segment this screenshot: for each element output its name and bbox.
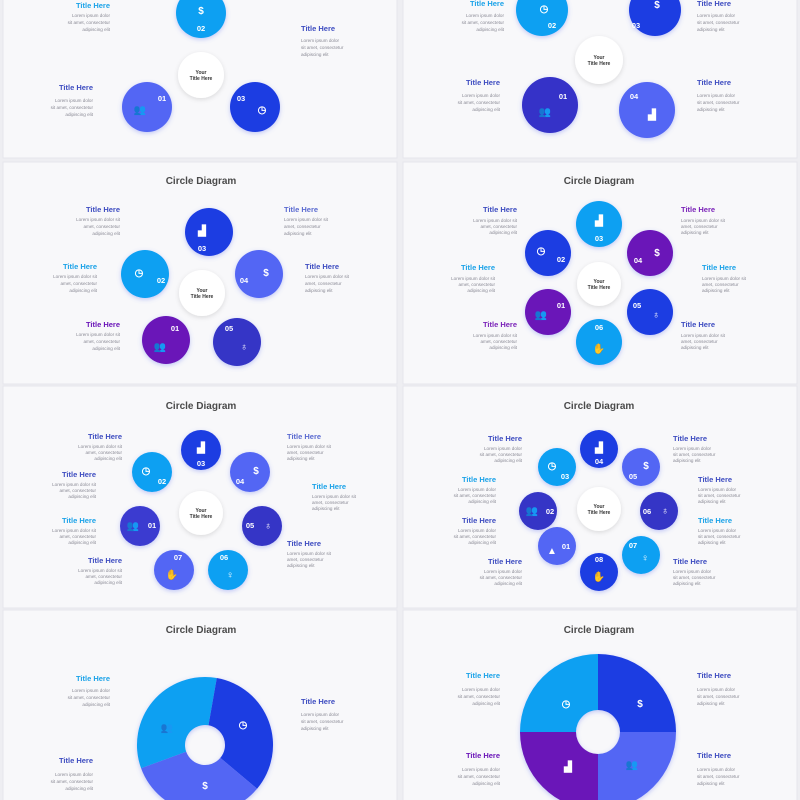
panel: slide 1 (3 circles): ◷ (258, 105, 267, 116)
panel: slide 5 (7 circles): 06 (220, 553, 228, 562)
panel: slide 2 (4 circles): ▟ (647, 108, 656, 121)
panel: slide 1 (3 circles): Title Here (190, 76, 213, 82)
panel: slide 3 (5 circles): 👥 (154, 342, 166, 353)
panel: slide 3 (5 circles): Title Here (284, 205, 318, 214)
panel: slide 5 (7 circles): 02 (158, 477, 166, 486)
panel: slide 8 (4-part ring): adipiscing elit (472, 781, 501, 786)
panel: slide 3 (5 circles): Title Here (63, 262, 97, 271)
panel: slide 5 (7 circles): amet, consectetur (59, 488, 96, 493)
panel: slide 4 (6 circles): adipiscing elit (489, 230, 518, 235)
panel: slide 4 (6 circles): ▟ (594, 214, 603, 227)
panel: slide 4 (6 circles): ✋ (593, 342, 605, 355)
panel: slide 6 (8 circles): Circle Diagram (564, 401, 634, 412)
panel: slide 6 (8 circles): Title Here (673, 434, 707, 443)
panel: slide 3 (5 circles): 04 (240, 276, 249, 285)
panel: slide 4 (6 circles): 03 (595, 234, 603, 243)
panel: slide 2 (4 circles): Lorem ipsum dolor (697, 13, 736, 18)
panel: slide 4 (6 circles): 👥 (535, 310, 547, 321)
panel: slide 4 (6 circles): amet, consectetur (702, 282, 739, 287)
panel: slide 5 (7 circles): adipiscing elit (94, 580, 123, 585)
panel: slide 7 (3-part ring): adipiscing elit (301, 726, 329, 731)
panel: slide 5 (7 circles): amet, consectetur (287, 557, 324, 562)
panel: slide 3 (5 circles): Lorem ipsum dolor sit (284, 217, 329, 222)
panel: slide 5 (7 circles): Title Here (190, 514, 213, 520)
panel: slide 4 (6 circles): Title Here (461, 263, 495, 272)
panel: slide 6 (8 circles): 04 (595, 457, 604, 466)
panel: slide 6 (8 circles): adipiscing elit (698, 540, 726, 545)
panel: slide 5 (7 circles): adipiscing elit (287, 456, 315, 461)
panel: slide 8 (4-part ring): Circle Diagram (564, 625, 634, 636)
panel: slide 8 (4-part ring): Lorem ipsum dolor (697, 687, 736, 692)
panel: slide 3 (5 circles) (3, 162, 397, 384)
panel: slide 7 (3-part ring): Lorem ipsum dolor (72, 688, 110, 693)
panel: slide 5 (7 circles): 👥 (127, 521, 139, 532)
panel: slide 6 (8 circles): ✋ (593, 570, 605, 583)
panel: slide 2 (4 circles): adipiscing elit (697, 107, 725, 112)
panel: slide 5 (7 circles): Title Here (88, 432, 122, 441)
panel: slide 4 (6 circles): Title Here (681, 320, 715, 329)
panel: slide 2 (4 circles): sit amet, consectetur (697, 20, 740, 25)
panel: slide 4 (6 circles): 05 (633, 301, 641, 310)
panel: slide 5 (7 circles): amet, consectetur (85, 574, 122, 579)
panel: slide 7 (3-part ring): Circle Diagram (166, 625, 236, 636)
panel: slide 6 (8 circles): adipiscing elit (494, 458, 523, 463)
panel: slide 2 (4 circles): ◷ (540, 4, 549, 15)
panel: slide 2 (4 circles): 👥 (539, 107, 551, 118)
panel: slide 4 (6 circles): adipiscing elit (681, 345, 709, 350)
panel: slide 5 (7 circles): adipiscing elit (287, 563, 315, 568)
panel: slide 4 (6 circles): ♁ (652, 310, 660, 321)
panel: slide 6 (8 circles): 06 (643, 507, 651, 516)
panel: slide 5 (7 circles): Title Here (62, 470, 96, 479)
panel: slide 4 (6 circles): Lorem ipsum dolor sit (473, 218, 518, 223)
panel: slide 3 (5 circles): Circle Diagram (166, 176, 236, 187)
panel: slide 4 (6 circles): Lorem ipsum dolor sit (451, 276, 496, 281)
panel: slide 3 (5 circles): Your (196, 288, 208, 294)
panel: slide 7 (3-part ring): Lorem ipsum dolor (55, 772, 93, 777)
panel: slide 7 (3-part ring): sit amet, consectetur (68, 695, 110, 700)
panel: slide 4 (6 circles): Your (593, 279, 605, 285)
panel: slide 6 (8 circles): adipiscing elit (698, 499, 726, 504)
panel: slide 3 (5 circles): adipiscing elit (69, 288, 98, 293)
panel: slide 6 (8 circles): ◷ (548, 461, 557, 472)
panel: slide 6 (8 circles) (403, 386, 797, 608)
panel: slide 5 (7 circles): 05 (246, 521, 254, 530)
panel: slide 4 (6 circles): 01 (557, 301, 565, 310)
panel: slide 4 (6 circles): adipiscing elit (681, 230, 709, 235)
panel: slide 4 (6 circles): 02 (557, 255, 565, 264)
panel: slide 6 (8 circles): Lorem ipsum dolor (458, 528, 496, 533)
panel: slide 5 (7 circles): 01 (148, 521, 156, 530)
panel: slide 7 (3-part ring): sit amet, consectetur (301, 719, 344, 724)
panel: slide 2 (4 circles): Lorem ipsum dolor (466, 13, 504, 18)
panel: slide 2 (4 circles): 04 (630, 92, 639, 101)
panel: slide 6 (8 circles): sit amet, consectetur (673, 452, 716, 457)
panel: slide 4 (6 circles): amet, consectetur (480, 224, 517, 229)
panel: slide 7 (3-part ring): $ (202, 781, 208, 792)
panel: slide 4 (6 circles) (403, 162, 797, 384)
panel: slide 5 (7 circles): amet, consectetur (59, 534, 96, 539)
panel: slide 2 (4 circles): Title Here (466, 78, 500, 87)
panel: slide 2 (4 circles): Your (593, 55, 605, 61)
panel: slide 3 (5 circles): adipiscing elit (284, 231, 312, 236)
panel: slide 4 (6 circles): amet, consectetur (681, 224, 718, 229)
panel: slide 2 (4 circles) (403, 0, 797, 158)
panel: slide 5 (7 circles) (3, 386, 397, 608)
panel: slide 5 (7 circles): Lorem ipsum dolor sit (52, 528, 97, 533)
panel: slide 6 (8 circles): ♁ (661, 506, 669, 517)
panel: slide 6 (8 circles): ♀ (641, 553, 649, 564)
panel: slide 5 (7 circles): ◷ (142, 466, 151, 477)
panel: slide 6 (8 circles): Lorem ipsum dolor (484, 569, 522, 574)
panel: slide 6 (8 circles): Title Here (462, 516, 496, 525)
panel: slide 3 (5 circles): amet, consectetur (60, 281, 97, 286)
panel: slide 3 (5 circles): Title Here (191, 294, 214, 300)
panel: slide 7 (3-part ring): ◷ (239, 720, 248, 731)
panel: slide 2 (4 circles): 02 (548, 21, 556, 30)
panel: slide 2 (4 circles): 03 (632, 21, 640, 30)
panel: slide 2 (4 circles): Lorem ipsum dolor (697, 93, 736, 98)
panel: slide 1 (3 circles): Title Here (301, 24, 335, 33)
panel: slide 5 (7 circles): Title Here (287, 432, 321, 441)
panel: slide 8 (4-part ring): sit amet, consectetur (697, 694, 740, 699)
panel: slide 6 (8 circles): Title Here (698, 516, 732, 525)
panel: slide 1 (3 circles): 03 (237, 94, 245, 103)
panel: slide 5 (7 circles): $ (253, 466, 259, 477)
panel: slide 8 (4-part ring): ▟ (563, 760, 572, 773)
panel: slide 8 (4-part ring): Title Here (466, 671, 500, 680)
panel: slide 5 (7 circles): ▟ (196, 441, 205, 454)
panel: slide 6 (8 circles): sit amet, consectetur (673, 575, 716, 580)
panel: slide 6 (8 circles): 08 (595, 555, 603, 564)
panel: slide 5 (7 circles): Title Here (88, 556, 122, 565)
panel: slide 5 (7 circles): Your (195, 508, 207, 514)
panel: slide 6 (8 circles): adipiscing elit (494, 581, 523, 586)
panel: slide 6 (8 circles): Lorem ipsum dolor (698, 528, 737, 533)
panel: slide 5 (7 circles): amet, consectetur (85, 450, 122, 455)
panel: slide 7 (3-part ring): sit amet, consectetur (51, 779, 93, 784)
panel: slide 4 (6 circles): adipiscing elit (489, 345, 518, 350)
panel: slide 3 (5 circles): amet, consectetur (305, 281, 342, 286)
panel: slide 7 (3-part ring): Title Here (76, 674, 110, 683)
panel: slide 1 (3 circles): Title Here (59, 83, 93, 92)
panel: slide 6 (8 circles): Lorem ipsum dolor (458, 487, 496, 492)
panel: slide 1 (3 circles): sit amet, consectetur (301, 45, 344, 50)
panel: slide 6 (8 circles): Title Here (488, 434, 522, 443)
panel: slide 3 (5 circles): adipiscing elit (92, 231, 121, 236)
panel: slide 6 (8 circles): 01 (562, 542, 570, 551)
panel: slide 5 (7 circles): Title Here (287, 539, 321, 548)
panel: slide 1 (3 circles): 02 (197, 24, 205, 33)
panel: slide 1 (3 circles): Title Here (76, 1, 110, 10)
panel: slide 8 (4-part ring): sit amet, consectetur (458, 694, 500, 699)
panel: slide 1 (3 circles): adipiscing elit (82, 27, 111, 32)
panel: slide 8 (4-part ring): adipiscing elit (472, 701, 501, 706)
panel: slide 1 (3 circles): adipiscing elit (301, 52, 329, 57)
panel: slide 8 (4-part ring): Lorem ipsum dolor (462, 687, 500, 692)
panel: slide 4 (6 circles): Lorem ipsum dolor sit (681, 218, 726, 223)
panel: slide 1 (3 circles): adipiscing elit (65, 112, 94, 117)
panel: slide 3 (5 circles): Lorem ipsum dolor sit (76, 332, 121, 337)
panel: slide 6 (8 circles): ▟ (594, 441, 603, 454)
panel: slide 4 (6 circles): Lorem ipsum dolor sit (473, 333, 518, 338)
panel: slide 7 (3-part ring): Lorem ipsum dolor (301, 712, 340, 717)
panel: slide 1 (3 circles): Your (195, 70, 207, 76)
panel: slide 6 (8 circles): adipiscing elit (468, 499, 497, 504)
panel: slide 5 (7 circles): Title Here (62, 516, 96, 525)
panel: slide 4 (6 circles): Circle Diagram (564, 176, 634, 187)
panel: slide 6 (8 circles): Title Here (488, 557, 522, 566)
panel: slide 3 (5 circles): Lorem ipsum dolor sit (76, 217, 121, 222)
panel: slide 7 (3-part ring) (3, 610, 397, 800)
panel: slide 6 (8 circles): 05 (629, 472, 637, 481)
panel: slide 5 (7 circles): adipiscing elit (94, 456, 123, 461)
panel: slide 8 (4-part ring): ◷ (562, 699, 571, 710)
panel: slide 3 (5 circles): amet, consectetur (83, 224, 120, 229)
panel: slide 6 (8 circles): ▲ (547, 546, 557, 557)
panel: slide 6 (8 circles): Lorem ipsum dolor (484, 446, 522, 451)
panel: slide 5 (7 circles): Lorem ipsum dolor sit (52, 482, 97, 487)
panel: slide 1 (3 circles): sit amet, consectetur (51, 105, 93, 110)
panel: slide 2 (4 circles): sit amet, consectetur (462, 20, 504, 25)
panel: slide 1 (3 circles): 01 (158, 94, 166, 103)
panel: slide 4 (6 circles): adipiscing elit (467, 288, 496, 293)
panel: slide 4 (6 circles): amet, consectetur (458, 282, 495, 287)
panel: slide 8 (4-part ring): adipiscing elit (697, 781, 725, 786)
panel: slide 6 (8 circles): Your (593, 504, 605, 510)
panel: slide 6 (8 circles): 03 (561, 472, 569, 481)
panel: slide 6 (8 circles): Title Here (462, 475, 496, 484)
panel: slide 1 (3 circles) (3, 0, 397, 158)
panel: slide 6 (8 circles): Lorem ipsum dolor (673, 446, 712, 451)
panel: slide 8 (4-part ring) (403, 610, 797, 800)
panel: slide 6 (8 circles): Lorem ipsum dolor (673, 569, 712, 574)
panel: slide 8 (4-part ring): sit amet, consectetur (458, 774, 500, 779)
panel: slide 7 (3-part ring): 👥 (161, 723, 173, 734)
panel: slide 3 (5 circles): 03 (198, 244, 206, 253)
panel: slide 8 (4-part ring): 👥 (626, 760, 638, 771)
panel: slide 4 (6 circles): 06 (595, 323, 603, 332)
panel: slide 5 (7 circles): amet, consectetur (287, 450, 324, 455)
panel: slide 3 (5 circles): 05 (225, 324, 233, 333)
panel: slide 4 (6 circles): amet, consectetur (480, 339, 517, 344)
panel: slide 6 (8 circles): Title Here (698, 475, 732, 484)
panel: slide 5 (7 circles): ♁ (264, 521, 272, 532)
panel: slide 5 (7 circles): ♀ (226, 570, 234, 581)
panel: slide 5 (7 circles): Title Here (312, 482, 346, 491)
panel: slide 2 (4 circles): adipiscing elit (472, 107, 501, 112)
panel: slide 6 (8 circles): adipiscing elit (468, 540, 497, 545)
panel: slide 6 (8 circles): sit amet, consectetur (480, 575, 522, 580)
panel: slide 2 (4 circles): 01 (559, 92, 567, 101)
panel: slide 4 (6 circles): $ (654, 248, 660, 259)
panel: slide 2 (4 circles): adipiscing elit (697, 27, 725, 32)
panel: slide 3 (5 circles): ♁ (240, 342, 248, 353)
panel: slide 4 (6 circles): Title Here (681, 205, 715, 214)
panel: slide 3 (5 circles): adipiscing elit (305, 288, 333, 293)
panel: slide 4 (6 circles): amet, consectetur (681, 339, 718, 344)
panel: slide 3 (5 circles): amet, consectetur (83, 339, 120, 344)
panel: slide 4 (6 circles): ◷ (537, 246, 546, 257)
panel: slide 4 (6 circles): Lorem ipsum dolor sit (702, 276, 747, 281)
panel: slide 1 (3 circles): Lorem ipsum dolor (72, 13, 110, 18)
panel: slide 6 (8 circles): sit amet, consectetur (454, 493, 496, 498)
panel: slide 5 (7 circles): 04 (236, 477, 245, 486)
panel: slide 5 (7 circles): adipiscing elit (68, 540, 97, 545)
panel: slide 2 (4 circles): Title Here (588, 61, 611, 67)
panel: slide 5 (7 circles): Circle Diagram (166, 401, 236, 412)
panel: slide 4 (6 circles): Title Here (702, 263, 736, 272)
panel: slide 5 (7 circles): amet, consectetur (312, 500, 349, 505)
panel: slide 4 (6 circles): Title Here (483, 205, 517, 214)
panel: slide 7 (3-part ring): adipiscing elit (65, 786, 94, 791)
panel: slide 2 (4 circles): Lorem ipsum dolor (462, 93, 500, 98)
panel: slide 3 (5 circles): $ (263, 268, 269, 279)
panel: slide 5 (7 circles): adipiscing elit (68, 494, 97, 499)
panel: slide 6 (8 circles): sit amet, consectetur (698, 534, 741, 539)
panel: slide 6 (8 circles): Title Here (673, 557, 707, 566)
panel: slide 6 (8 circles): 02 (546, 507, 554, 516)
panel: slide 8 (4-part ring): Title Here (697, 751, 731, 760)
panel: slide 1 (3 circles): sit amet, consectetur (68, 20, 110, 25)
panel: slide 3 (5 circles): Title Here (305, 262, 339, 271)
panel: slide 6 (8 circles): sit amet, consectetur (454, 534, 496, 539)
panel: slide 3 (5 circles): Title Here (86, 320, 120, 329)
panel: slide 7 (3-part ring): Title Here (59, 756, 93, 765)
panel: slide 8 (4-part ring): Title Here (697, 671, 731, 680)
panel: slide 6 (8 circles): Lorem ipsum dolor (698, 487, 737, 492)
panel: slide 4 (6 circles): 04 (634, 256, 643, 265)
panel: slide 3 (5 circles): 01 (171, 324, 179, 333)
panel: slide 2 (4 circles): sit amet, consectetur (697, 100, 740, 105)
panel: slide 5 (7 circles): 03 (197, 459, 205, 468)
panel: slide 3 (5 circles): Title Here (86, 205, 120, 214)
panel: slide 6 (8 circles): adipiscing elit (673, 458, 701, 463)
panel: slide 2 (4 circles): $ (654, 0, 660, 11)
panel: slide 2 (4 circles): Title Here (697, 78, 731, 87)
panel: slide 6 (8 circles): Title Here (588, 510, 611, 516)
panel: slide 4 (6 circles): Lorem ipsum dolor sit (681, 333, 726, 338)
panel: slide 1 (3 circles): Lorem ipsum dolor (301, 38, 340, 43)
panel: slide 7 (3-part ring): Title Here (301, 697, 335, 706)
panel: slide 6 (8 circles): sit amet, consectetur (698, 493, 741, 498)
panel: slide 3 (5 circles): ◷ (135, 268, 144, 279)
panel: slide 6 (8 circles): adipiscing elit (673, 581, 701, 586)
panel: slide 5 (7 circles): ✋ (166, 568, 178, 581)
panel: slide 3 (5 circles): 02 (157, 276, 165, 285)
panel: slide 6 (8 circles): 07 (629, 541, 637, 550)
panel: slide 2 (4 circles): sit amet, consectetur (458, 100, 500, 105)
panel: slide 5 (7 circles): Lorem ipsum dolor sit (78, 444, 123, 449)
panel: slide 7 (3-part ring): adipiscing elit (82, 702, 111, 707)
panel: slide 8 (4-part ring): sit amet, consectetur (697, 774, 740, 779)
panel: slide 3 (5 circles): Lorem ipsum dolor sit (305, 274, 350, 279)
panel: slide 3 (5 circles): Lorem ipsum dolor sit (53, 274, 98, 279)
panel: slide 8 (4-part ring): Title Here (466, 751, 500, 760)
panel: slide 1 (3 circles): Lorem ipsum dolor (55, 98, 93, 103)
panel: slide 4 (6 circles): Title Here (483, 320, 517, 329)
panel: slide 8 (4-part ring): $ (637, 699, 643, 710)
panel: slide 3 (5 circles): adipiscing elit (92, 346, 121, 351)
panel: slide 6 (8 circles): sit amet, consectetur (480, 452, 522, 457)
panel: slide 5 (7 circles): Lorem ipsum dolor sit (78, 568, 123, 573)
panel: slide 5 (7 circles): adipiscing elit (312, 506, 340, 511)
panel: slide 5 (7 circles): 07 (174, 553, 182, 562)
panel: slide 6 (8 circles): 👥 (526, 506, 538, 517)
panel: slide 4 (6 circles): Title Here (588, 285, 611, 291)
panel: slide 8 (4-part ring): Lorem ipsum dolor (697, 767, 736, 772)
panel: slide 6 (8 circles): $ (643, 461, 649, 472)
panel: slide 3 (5 circles): ▟ (197, 224, 206, 237)
panel: slide 2 (4 circles): adipiscing elit (476, 27, 505, 32)
panel: slide 3 (5 circles): amet, consectetur (284, 224, 321, 229)
panel: slide 1 (3 circles): $ (198, 6, 204, 17)
panel: slide 1 (3 circles): 👥 (134, 105, 146, 116)
panel: slide 8 (4-part ring): adipiscing elit (697, 701, 725, 706)
panel: slide 4 (6 circles): adipiscing elit (702, 288, 730, 293)
panel: slide 8 (4-part ring): Lorem ipsum dolor (462, 767, 500, 772)
panel: slide 5 (7 circles): Lorem ipsum dolor sit (287, 444, 332, 449)
panel: slide 5 (7 circles): Lorem ipsum dolor sit (287, 551, 332, 556)
panel: slide 5 (7 circles): Lorem ipsum dolor sit (312, 494, 357, 499)
